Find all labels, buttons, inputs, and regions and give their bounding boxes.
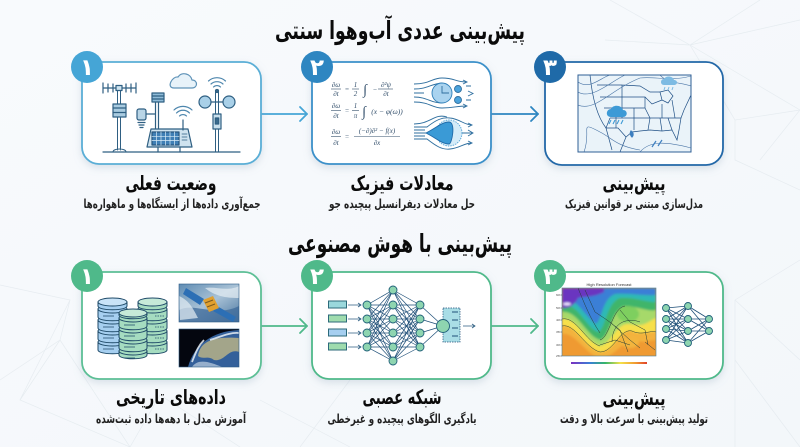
diagram: input blocks bbox=[328, 301, 361, 350]
equations: ∂ω bbox=[332, 128, 340, 136]
badge: 1: ۱ bbox=[80, 55, 94, 81]
badge: 2: ۲ bbox=[310, 55, 324, 81]
equations: ∫ bbox=[361, 105, 367, 120]
equations: ∂²ψ bbox=[381, 81, 392, 89]
caption: forecast: مدل‌سازی مبتنی بر قوانین فیزیک bbox=[565, 196, 703, 211]
badge: 3 bbox=[534, 260, 566, 292]
chart: forecast heatmap: High Resolution Forecast bbox=[587, 282, 632, 287]
chart: forecast heatmap: 40N bbox=[556, 318, 562, 322]
icon: green database front bbox=[119, 309, 147, 359]
heading: AI forecast output: پیش‌بینی bbox=[602, 386, 666, 411]
equations: ∂t bbox=[333, 139, 340, 147]
equations: 2 bbox=[354, 90, 358, 98]
badge: 3: ۳ bbox=[543, 55, 557, 81]
badge: 1 bbox=[71, 260, 103, 292]
arrow: step 2 to step 3 bbox=[491, 107, 538, 121]
equations: ∂ω bbox=[332, 81, 340, 89]
diagram: network connections bbox=[367, 290, 443, 361]
icon: rain cloud large bbox=[607, 106, 627, 124]
panel: physics equations bbox=[301, 51, 491, 164]
panel: current state bbox=[71, 51, 261, 164]
arrow: AI step 1 to step 2 bbox=[261, 319, 307, 333]
chart: forecast heatmap: 25N bbox=[556, 354, 562, 358]
icon: rain cloud small bbox=[661, 76, 677, 90]
badge: 3 bbox=[534, 51, 566, 83]
badge: 2: ۲ bbox=[310, 264, 324, 290]
equations: ∂t bbox=[383, 90, 390, 98]
caption: neural network: یادگیری الگوهای پیچیده و غیرخطی bbox=[328, 411, 476, 426]
badge: 2 bbox=[301, 51, 333, 83]
equations: = bbox=[345, 133, 350, 141]
chart: forecast heatmap: 35N bbox=[556, 330, 562, 334]
image: earth from space bbox=[179, 329, 239, 367]
heading: historical data: داده‌های تاریخی bbox=[116, 385, 226, 409]
badge: 1: ۱ bbox=[80, 264, 94, 290]
heading: forecast: پیش‌بینی bbox=[602, 171, 666, 196]
equations: ∫ bbox=[362, 83, 368, 98]
caption: current state: جمع‌آوری داده‌ها از ایستگاه‌ها و ماهواره‌ها bbox=[84, 196, 260, 211]
title: AI forecast: پیش‌بینی با هوش مصنوعی bbox=[288, 229, 512, 259]
diagram: network nodes bbox=[363, 286, 450, 365]
equations: ∂t bbox=[333, 112, 340, 120]
equations: (−∂)∂² − f(x) bbox=[359, 127, 396, 135]
heading: physics equations: معادلات فیزیک bbox=[350, 171, 454, 195]
chart: forecast heatmap bbox=[556, 282, 656, 364]
equations bbox=[331, 81, 403, 147]
icon: wind arrows bbox=[630, 131, 662, 147]
equations: = bbox=[345, 107, 350, 115]
chart: forecast heatmap: 50N bbox=[556, 306, 562, 310]
badge: 3: ۳ bbox=[543, 264, 557, 290]
diagram: output feature block bbox=[443, 308, 475, 342]
panel: AI forecast output bbox=[534, 260, 723, 379]
equations: ∂t bbox=[333, 90, 340, 98]
equations: − bbox=[373, 86, 378, 94]
panel: historical data bbox=[71, 260, 261, 379]
chart: forecast heatmap: 30N bbox=[556, 343, 562, 347]
panel: forecast weather map bbox=[534, 51, 723, 165]
chart: forecast heatmap: 60N bbox=[556, 293, 562, 297]
arrow: AI step 2 to step 3 bbox=[491, 319, 538, 333]
equations: (x − φ(ω)) bbox=[371, 107, 403, 116]
diagram: small neural network bbox=[662, 302, 712, 346]
equations: 1 bbox=[354, 102, 357, 110]
badge: 1 bbox=[71, 51, 103, 83]
caption: AI forecast output: تولید پیش‌بینی با سرعت بالا و دقت bbox=[560, 411, 708, 426]
equations: ∂ω bbox=[332, 102, 340, 110]
equations: = bbox=[345, 86, 350, 94]
equations: ∂x bbox=[374, 139, 381, 147]
icon: blue database bbox=[98, 298, 127, 354]
caption: physics equations: حل معادلات دیفرانسیل پیچیده جو bbox=[328, 196, 475, 211]
badge: 2 bbox=[301, 260, 333, 292]
caption: historical data: آموزش مدل با دهه‌ها داده ثبت‌شده bbox=[96, 411, 247, 426]
equations: π bbox=[354, 112, 358, 120]
heading: neural network: شبکه عصبی bbox=[362, 385, 442, 409]
icon: weather station bbox=[103, 74, 240, 152]
image: satellite in orbit bbox=[179, 284, 239, 322]
heading: current state: وضعیت فعلی bbox=[126, 171, 216, 195]
icon: flow over cylinder bbox=[414, 78, 473, 108]
title: traditional numerical forecast: پیش‌بینی عددی آب‌وهوا سنتی bbox=[275, 15, 525, 46]
arrow: step 1 to step 2 bbox=[261, 107, 307, 121]
panel: neural network bbox=[301, 260, 491, 379]
equations: 1 bbox=[354, 81, 357, 89]
icon: flow over airfoil bbox=[414, 116, 473, 149]
icon: green database back bbox=[138, 298, 167, 354]
weather map bbox=[578, 75, 691, 152]
